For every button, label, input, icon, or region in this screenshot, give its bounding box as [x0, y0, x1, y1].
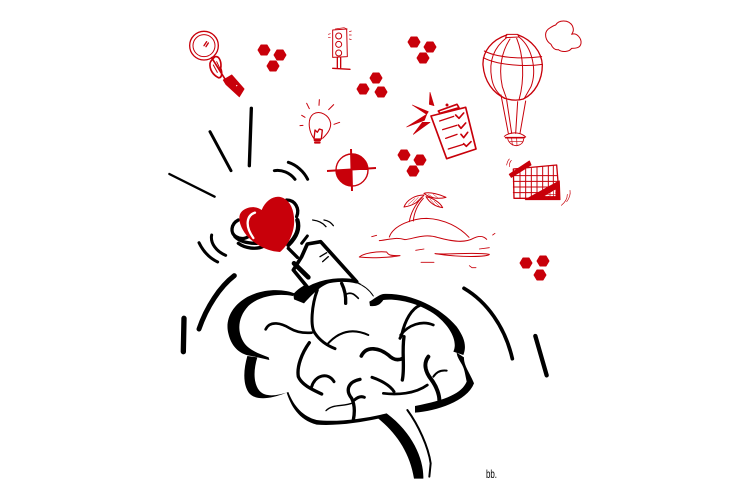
motion lines around brain — [183, 276, 547, 375]
cluster lower right — [520, 256, 549, 280]
icon: palm tree island — [359, 193, 495, 268]
icon: magnifying glass in hand — [190, 31, 244, 97]
icon: light bulb — [300, 100, 340, 143]
icon: traffic light — [328, 28, 351, 69]
cluster middle — [398, 150, 426, 176]
icon: clipboard checklist with burst — [407, 92, 476, 159]
icon: calendar — [507, 159, 570, 205]
cluster top right — [408, 37, 436, 63]
icon: cloud — [546, 21, 581, 52]
icon: hand and arm holding heart — [232, 200, 357, 288]
icon: crosshair target — [327, 149, 376, 191]
icon: red dot clusters — [258, 37, 549, 280]
cluster top left — [258, 45, 286, 71]
signature: bb. — [486, 467, 497, 481]
motion lines around heart — [169, 108, 333, 262]
icon: hot air balloon — [483, 34, 542, 146]
cluster center — [357, 73, 387, 97]
icon: red heart — [239, 197, 294, 252]
icon: brain — [227, 278, 474, 479]
